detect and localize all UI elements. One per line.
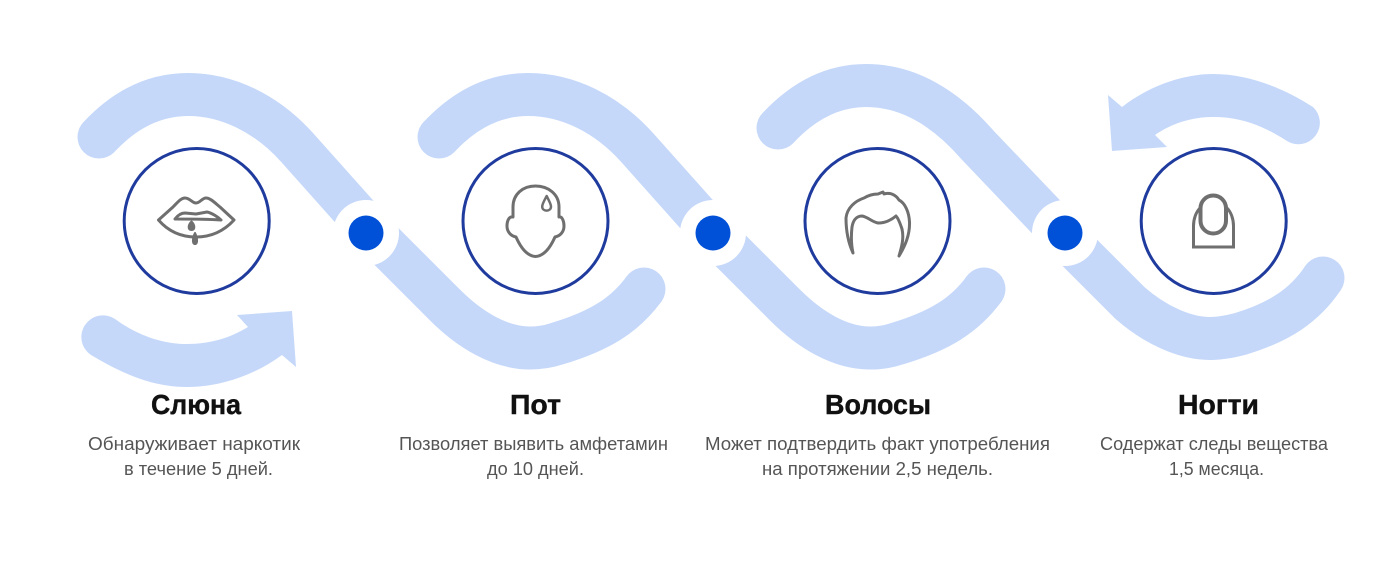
text: hair description bbox=[705, 434, 1050, 479]
wave: third lower arc bbox=[723, 243, 1006, 348]
text: sweat description: до 10 дней. bbox=[487, 459, 584, 479]
wave: third upper arc bbox=[756, 86, 1050, 221]
icon: lips bbox=[158, 198, 234, 244]
wave: fourth lower arc bbox=[1075, 248, 1344, 338]
ring 1 bbox=[124, 148, 269, 294]
icon: head with sweat drop bbox=[507, 186, 564, 256]
junction dot 1 bbox=[333, 200, 399, 266]
text: saliva description: Обнаруживает наркотик bbox=[88, 434, 300, 454]
heading: sweat: Пот bbox=[510, 389, 561, 420]
wave: second lower arc bbox=[383, 243, 666, 348]
text: hair description: Может подтвердить факт употребления bbox=[705, 434, 1050, 454]
bottom arrow: start of the wave bbox=[81, 311, 296, 387]
text: nails description: 1,5 месяца. bbox=[1169, 459, 1264, 479]
icon: fingernail bbox=[1194, 196, 1234, 247]
text: sweat description bbox=[399, 434, 668, 479]
ring 4 bbox=[1141, 148, 1286, 294]
text: saliva description bbox=[88, 434, 300, 479]
text: hair description: на протяжении 2,5 недель. bbox=[762, 459, 993, 479]
junction dot 2 bbox=[680, 200, 746, 266]
text: sweat description: Позволяет выявить амфетамин bbox=[399, 434, 668, 454]
text: saliva description: в течение 5 дней. bbox=[124, 459, 273, 479]
ring 3 bbox=[805, 148, 950, 294]
top arrow: end of the wave bbox=[1108, 74, 1320, 151]
icon: hair bbox=[846, 192, 910, 256]
ring 2 bbox=[463, 148, 608, 294]
heading: nails: Ногти bbox=[1178, 389, 1259, 420]
text: nails description bbox=[1100, 434, 1329, 479]
heading: saliva: Слюна bbox=[151, 389, 241, 420]
junction dot 3 bbox=[1032, 200, 1098, 266]
wave: second upper arc bbox=[418, 94, 700, 218]
text: nails description: Содержат следы вещества bbox=[1100, 434, 1329, 454]
heading: hair: Волосы bbox=[825, 389, 931, 420]
wave: first upper arc bbox=[78, 94, 360, 218]
